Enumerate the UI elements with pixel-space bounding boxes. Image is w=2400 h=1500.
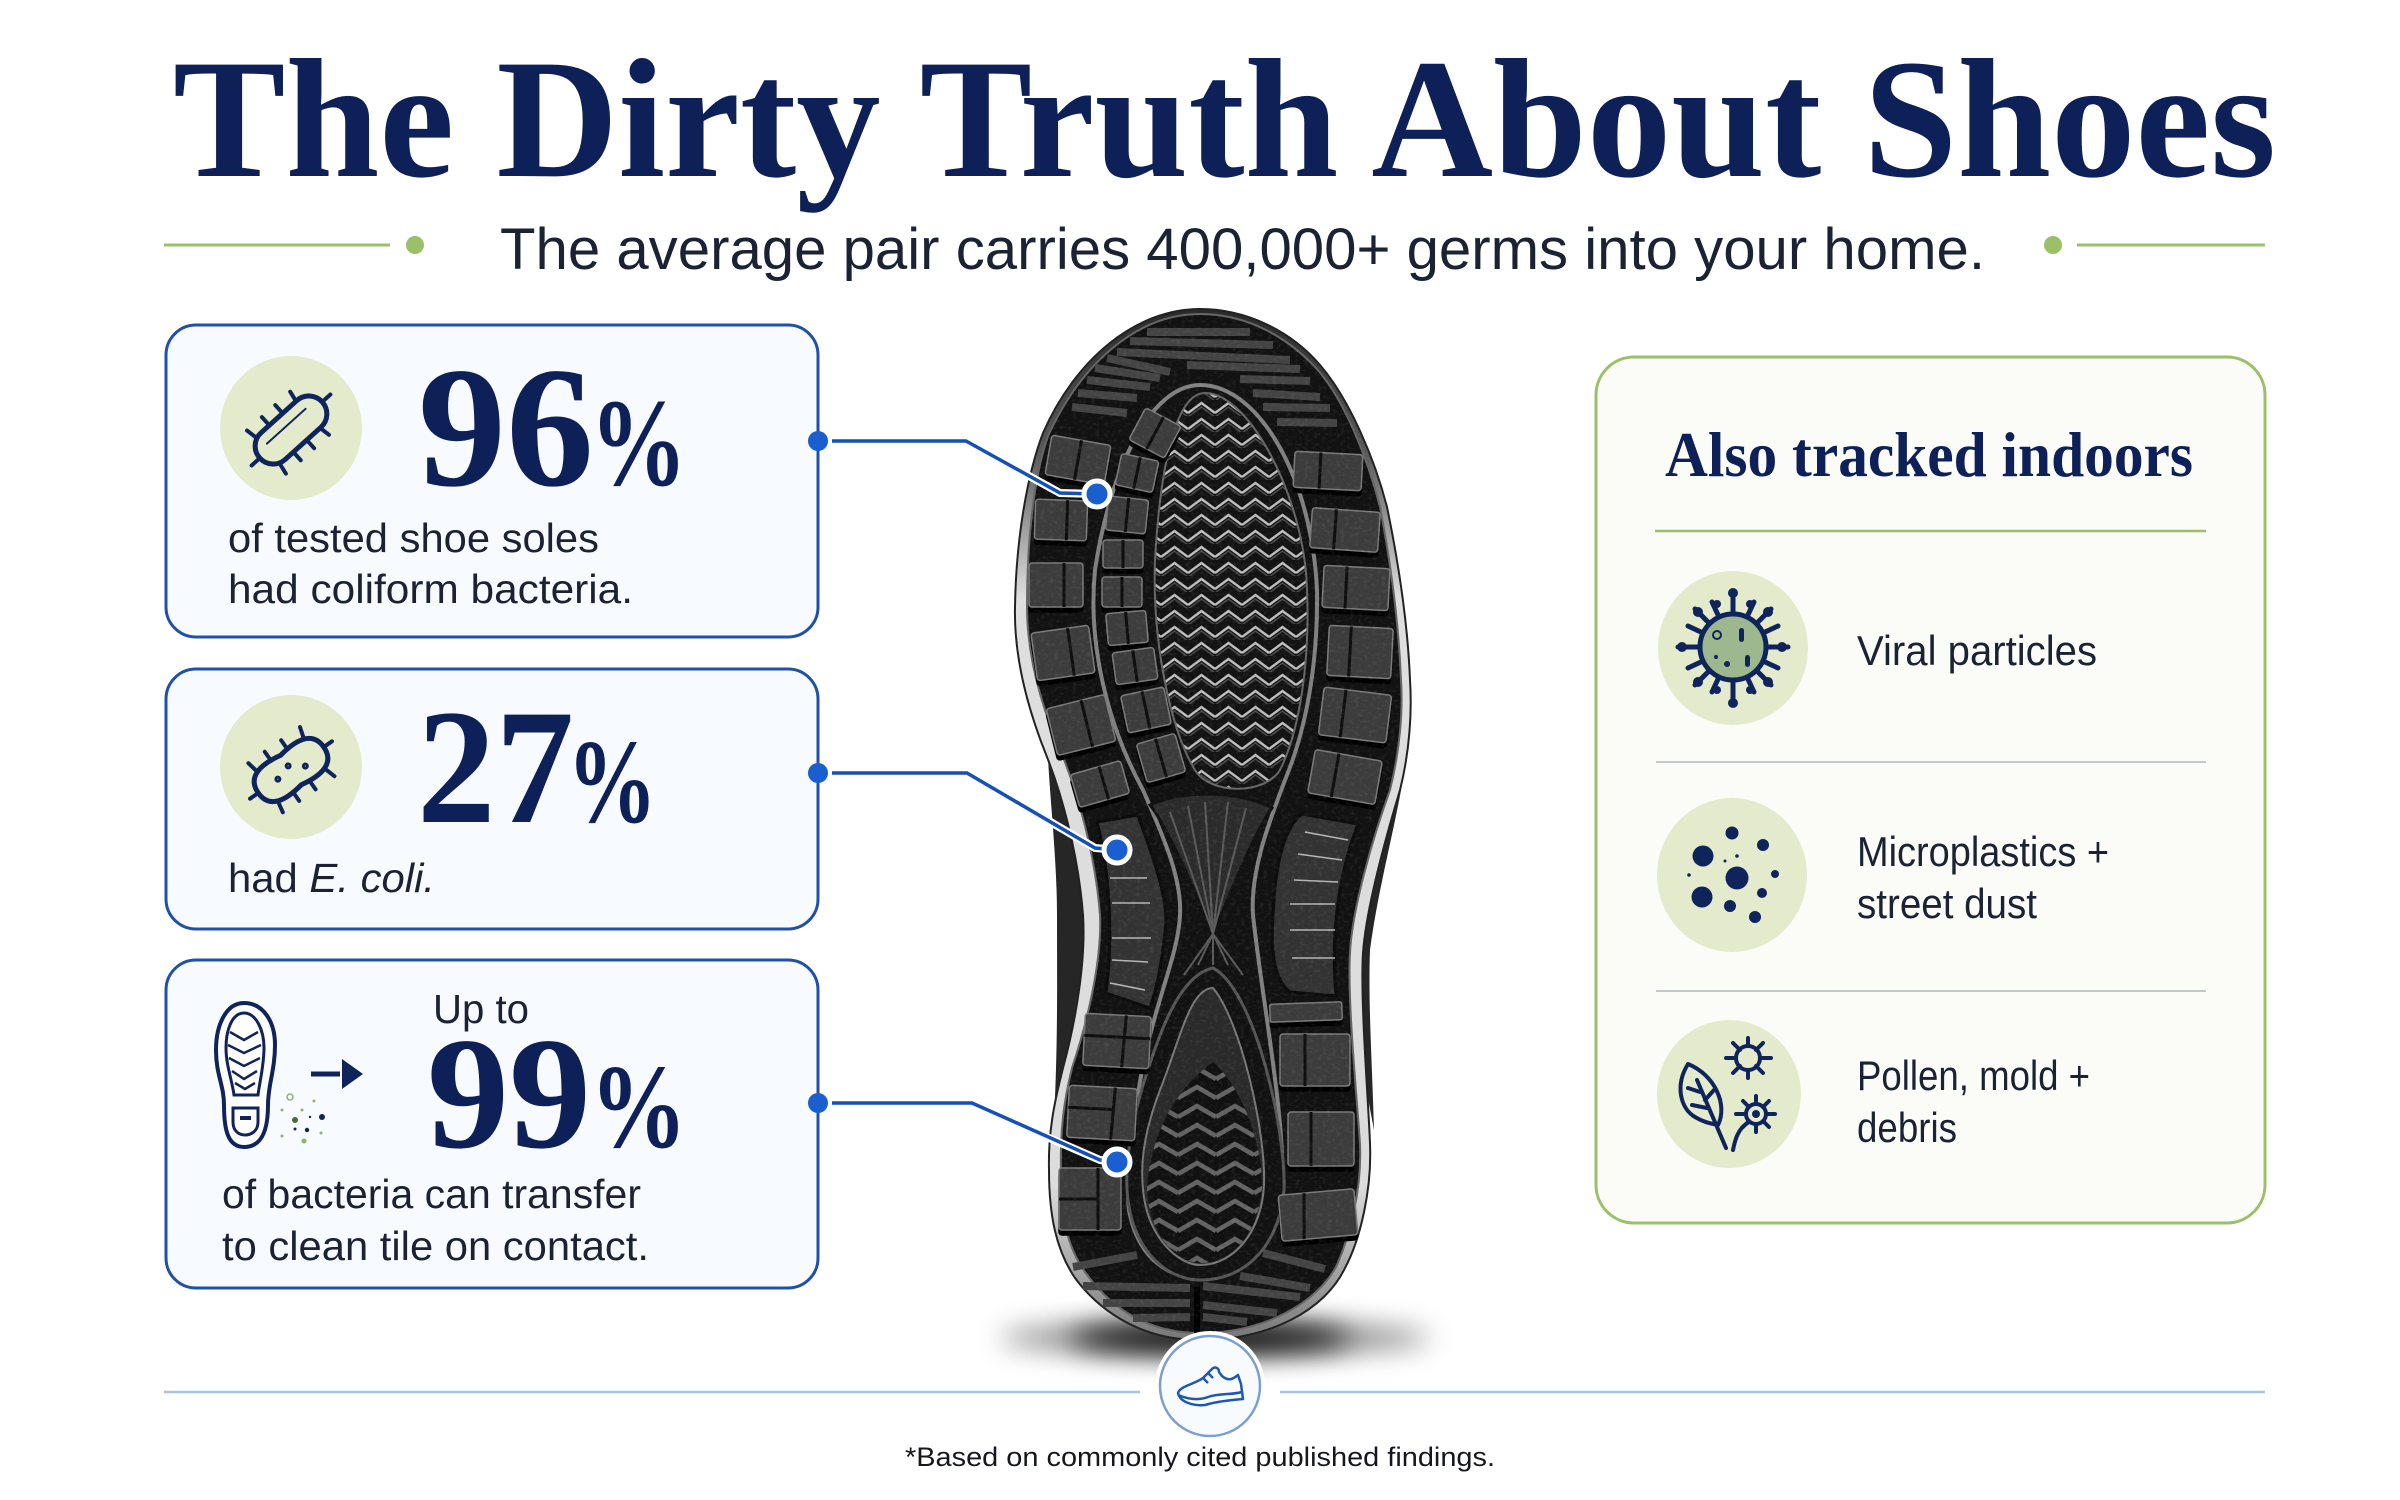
left inner tread blocks (1102, 408, 1186, 783)
heel groove (1194, 1287, 1200, 1333)
text: description: had E. coli. (228, 855, 435, 901)
stat: 99 percent: % (590, 1040, 687, 1173)
icon: E. coli bacterium (220, 695, 362, 839)
text: pollen, mold + debris: Pollen, mold + (1857, 1052, 2090, 1099)
text: description: had coliform bacteria. (228, 566, 633, 612)
footnote: *Based on commonly cited published findings. (905, 1442, 1495, 1472)
subtitle with accent rules: The average pair carries 400,000+ germs into your home. (500, 217, 1985, 282)
text: microplastics + street dust: street dust (1857, 880, 2037, 927)
left outer tread blocks (1029, 435, 1130, 808)
item: viral particles (1658, 571, 1808, 725)
connector: 27% card to sole (808, 763, 1130, 863)
text: description: to clean tile on contact. (222, 1223, 649, 1269)
text: viral particles: Viral particles (1857, 627, 2097, 674)
shoe upper slivers (1048, 757, 1402, 1130)
stat: 99 percent (427, 1004, 687, 1182)
stat: 27 percent: 27 (417, 677, 574, 858)
midfoot cross (1150, 794, 1272, 975)
text: microplastics + street dust (1857, 828, 2109, 927)
panel: 27% stat card (166, 669, 818, 929)
arch panels (1097, 814, 1358, 1008)
panel: 99% stat card (166, 960, 818, 1288)
heading: Also tracked indoors (1665, 419, 2193, 490)
central ring (1093, 385, 1317, 1278)
text: pollen, mold + debris: debris (1857, 1104, 1957, 1151)
item: microplastics (1657, 798, 1807, 952)
title: The Dirty Truth About Shoes (173, 25, 2276, 213)
footer divider with shoe badge (164, 1331, 2265, 1441)
icon: bacterium (220, 356, 362, 500)
stat: 96 percent: % (590, 375, 687, 513)
toe bars (1072, 332, 1337, 423)
text: description: of tested shoe soles (228, 515, 599, 561)
text: microplastics + street dust: Microplastics + (1857, 828, 2109, 875)
stat: 96 percent: 96 (418, 333, 594, 523)
panel: 96% stat card (166, 325, 818, 637)
forefoot chevron tread (1155, 393, 1308, 789)
heel bars (1073, 1253, 1325, 1322)
stat: 99 percent: 99 (427, 1004, 591, 1182)
text: description (228, 515, 633, 612)
heel side blocks (1059, 1002, 1358, 1241)
item: pollen, mold and debris (1657, 1020, 1801, 1168)
ground shadow (1000, 1324, 1430, 1352)
heel teardrop tread (1127, 968, 1284, 1280)
icon: shoe (1178, 1368, 1243, 1405)
black outsole (1027, 314, 1402, 1333)
stat: 27 percent (417, 677, 657, 858)
panel: also tracked indoors (1596, 357, 2265, 1223)
text: description (222, 1171, 649, 1269)
white midsole (1015, 309, 1411, 1340)
connector: 96% card to sole (808, 431, 1110, 507)
right outer tread blocks (1293, 451, 1393, 805)
shoe sole illustration (1000, 309, 1430, 1352)
icon: shoe print with transfer arrow (216, 1003, 363, 1147)
connector: 99% card to sole (808, 1093, 1130, 1175)
text: up to: Up to (433, 986, 529, 1032)
text: pollen, mold + debris (1857, 1052, 2090, 1151)
stat: 96 percent (418, 333, 687, 523)
stat: 27 percent: % (567, 715, 657, 848)
text: description: of bacteria can transfer (222, 1171, 641, 1217)
